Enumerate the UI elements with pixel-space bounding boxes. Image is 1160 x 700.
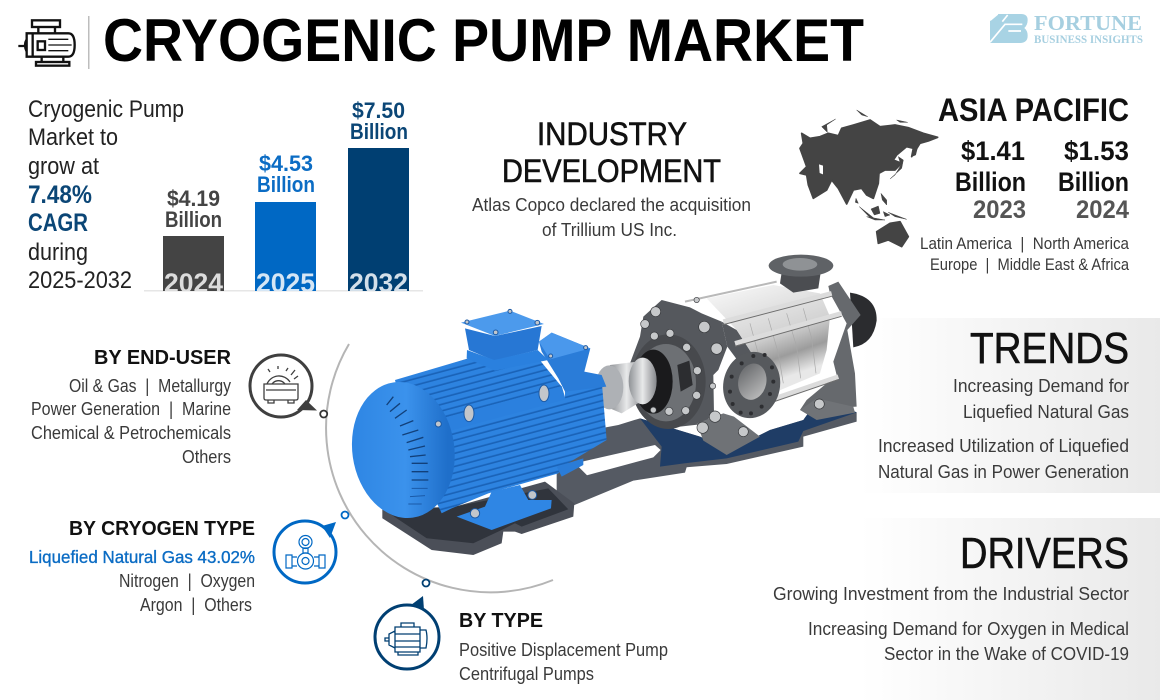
- text: trends: Liquefied Natural Gas: [963, 402, 1129, 422]
- marker: end-user dot: [320, 410, 327, 418]
- text: by type: Centrifugal Pumps: [459, 664, 594, 684]
- pump casing: [630, 300, 727, 427]
- text: industry development: Atlas Copco declared the acquisition: [472, 195, 751, 215]
- text: Asia Pacific: Latin America | North America: [920, 235, 1130, 253]
- text: by cryogen type: Nitrogen | Oxygen: [119, 571, 255, 591]
- logo: Fortune Business Insights: [990, 11, 1143, 46]
- text: trends: TRENDS: [970, 324, 1129, 373]
- bar: 2032: Billion: [350, 119, 408, 144]
- text: CAGR summary: during: [28, 239, 88, 266]
- text: trends: [878, 324, 1129, 482]
- motor feet: [457, 485, 552, 530]
- text: CAGR summary: [28, 96, 184, 294]
- text: CAGR summary: 7.48%: [28, 181, 92, 209]
- text: drivers: Increasing Demand for Oxygen in Medical: [808, 619, 1129, 639]
- text: by cryogen type: Liquefied Natural Gas 43.02%: [29, 547, 255, 567]
- text: by end-user: Others: [182, 447, 231, 467]
- text: by end-user: Chemical & Petrochemicals: [31, 423, 231, 443]
- text: by end-user: Oil & Gas | Metallurgy: [69, 376, 231, 396]
- text: CAGR summary: Cryogenic Pump: [28, 96, 184, 123]
- bar: 2024: Billion: [165, 207, 222, 232]
- text: Asia Pacific: ASIA PACIFIC: [938, 92, 1129, 128]
- base plate left: [382, 482, 574, 555]
- bar: 2025: $4.53: [259, 151, 313, 176]
- front terminal housing: [539, 333, 606, 392]
- text: drivers: DRIVERS: [960, 529, 1129, 578]
- text: drivers: Sector in the Wake of COVID-19: [884, 644, 1129, 664]
- discharge flange: [717, 346, 786, 423]
- icon: end-user badge: [250, 355, 317, 417]
- lifting band: [446, 386, 566, 431]
- text: Asia Pacific: Europe | Middle East & Africa: [930, 256, 1130, 274]
- panel: trends background: [860, 318, 1160, 493]
- text: Asia Pacific: $1.53: [1064, 136, 1129, 166]
- text: drivers: Growing Investment from the Industrial Sector: [773, 584, 1129, 604]
- text: industry development: [472, 116, 751, 240]
- text: CAGR summary: grow at: [28, 153, 99, 180]
- title: CRYOGENIC PUMP MARKET: [103, 7, 864, 74]
- bolts: [641, 297, 824, 437]
- bar: 2032: [348, 98, 409, 298]
- motor hardware: [435, 309, 588, 518]
- text: Asia Pacific: Billion: [1058, 167, 1129, 197]
- marker: cryogen type dot: [342, 512, 348, 518]
- bar: 2032: $7.50: [352, 98, 405, 123]
- bar: 2024: [163, 186, 224, 298]
- text: Asia Pacific: 2024: [1076, 196, 1129, 224]
- panel: drivers background: [860, 518, 1160, 700]
- text: by cryogen type: Argon | Others: [140, 595, 252, 615]
- fan cap: [343, 375, 463, 525]
- divider: [88, 16, 90, 69]
- text: industry development: of Trillium US Inc.: [542, 220, 677, 240]
- image: cryogenic pump illustration: [343, 255, 877, 555]
- end frame: [800, 282, 861, 410]
- text: by cryogen type: BY CRYOGEN TYPE: [69, 518, 255, 540]
- pump section: [557, 255, 877, 508]
- text: Asia Pacific: [920, 92, 1130, 274]
- arc connector: [326, 344, 553, 592]
- text: CAGR summary: CAGR: [28, 209, 88, 237]
- top flange: [780, 273, 821, 293]
- text: Asia Pacific: 2023: [973, 196, 1026, 224]
- text: by cryogen type: [29, 518, 255, 615]
- text: trends: Increased Utilization of Liquefied: [878, 436, 1129, 456]
- coupling: [610, 362, 643, 413]
- logo wordmark: BUSINESS INSIGHTS: [1034, 34, 1143, 46]
- logo mark: [990, 14, 1028, 43]
- icon: by type badge: [375, 596, 439, 669]
- text: by type: [459, 610, 668, 684]
- text: Asia Pacific: Billion: [955, 167, 1026, 197]
- base plate right: [557, 397, 857, 508]
- motor section: [343, 309, 607, 555]
- bar: 2025: 2025: [256, 268, 315, 298]
- bar chart: market size: [144, 98, 423, 298]
- logo wordmark: [1034, 11, 1143, 46]
- stainless barrel: [707, 285, 830, 392]
- bar: 2025: [255, 151, 316, 298]
- barrel backing: [722, 322, 777, 402]
- text: by end-user: [31, 347, 232, 467]
- text: trends: Natural Gas in Power Generation: [878, 462, 1129, 482]
- bar: 2032: 2032: [349, 268, 408, 298]
- text: industry development: INDUSTRY: [537, 116, 687, 152]
- bar: 2025: Billion: [257, 172, 315, 197]
- text: drivers: [773, 529, 1129, 664]
- header: [18, 7, 864, 74]
- bar: 2024: 2024: [164, 268, 223, 298]
- logo wordmark: FORTUNE: [1034, 11, 1142, 35]
- pump rods: [685, 282, 842, 404]
- marker: type dot: [422, 580, 430, 586]
- text: by end-user: BY END-USER: [94, 347, 232, 369]
- text: CAGR summary: 2025-2032: [28, 267, 132, 294]
- rear fin section: [565, 380, 607, 465]
- text: by type: Positive Displacement Pump: [459, 640, 668, 660]
- main fin section: [395, 358, 568, 513]
- map: Asia Pacific: [800, 110, 938, 247]
- text: industry development: DEVELOPMENT: [502, 153, 721, 189]
- bar: 2024: $4.19: [167, 186, 220, 211]
- main terminal box: [465, 326, 542, 361]
- text: Asia Pacific: $1.41: [961, 136, 1025, 166]
- text: trends: Increasing Demand for: [953, 376, 1129, 396]
- icon: cryogen type badge: [274, 521, 336, 583]
- icon: electric motor: [18, 20, 75, 66]
- text: by end-user: Power Generation | Marine: [31, 399, 231, 419]
- rear pulley: [850, 293, 877, 347]
- text: CAGR summary: Market to: [28, 124, 118, 151]
- text: by type: BY TYPE: [459, 610, 543, 632]
